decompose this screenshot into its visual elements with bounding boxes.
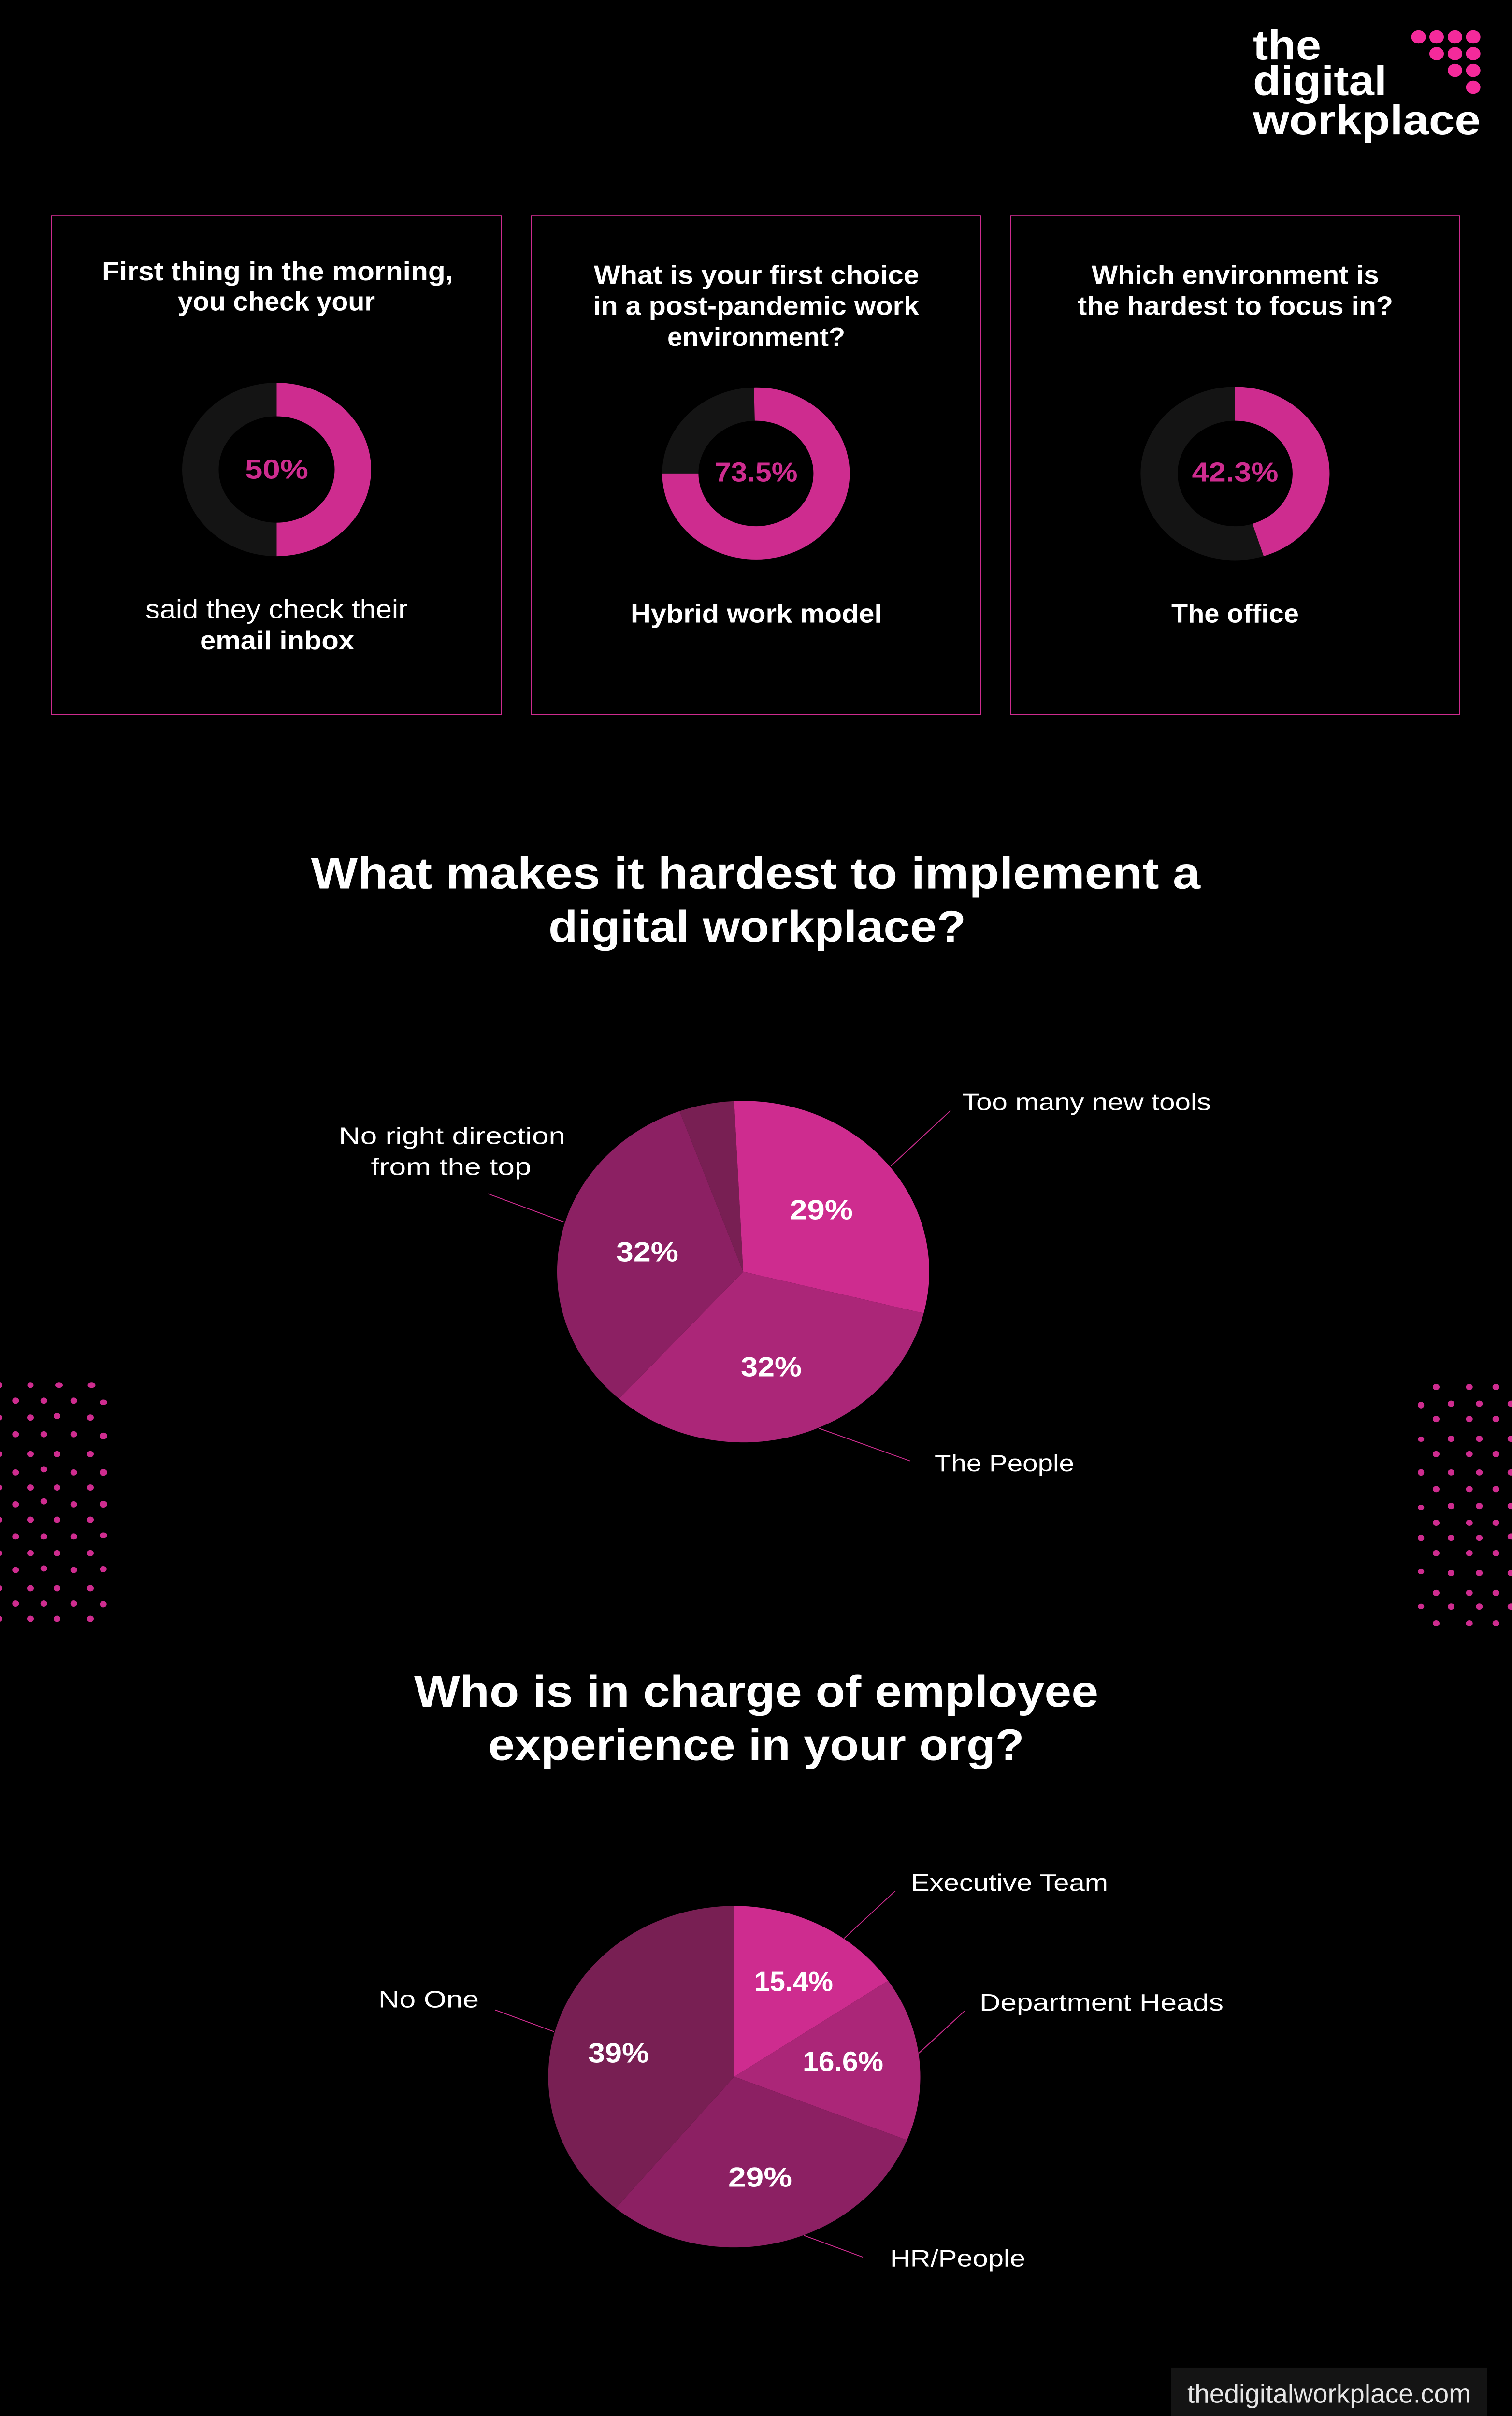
question text: What is your first choice <box>594 260 919 290</box>
category labels: from the top <box>371 1153 532 1180</box>
panel: post-pandemic work environment <box>532 216 980 715</box>
donut chart: 50%: 50% <box>245 454 308 485</box>
value labels: 16.6% <box>803 2045 883 2077</box>
question text <box>593 260 920 352</box>
logo wordmark <box>1253 22 1481 144</box>
value labels: 32% <box>616 1236 678 1267</box>
logo: the digital workplace <box>1253 22 1481 144</box>
answer text: said they check their <box>145 595 408 624</box>
panel: hardest environment to focus in <box>1011 216 1460 715</box>
category labels: Too many new tools <box>962 1089 1211 1115</box>
panel border <box>1011 216 1460 715</box>
value labels: 39% <box>588 2037 649 2069</box>
logo wordmark: workplace <box>1253 97 1481 144</box>
question text: environment? <box>667 322 845 352</box>
pie chart: employee experience owner <box>378 1869 1224 2272</box>
category labels: Department Heads <box>979 1989 1224 2016</box>
donut chart: 42.3% <box>1159 387 1329 556</box>
pie chart: hardest to implement <box>339 1089 1211 1477</box>
donut chart: 42.3%: 42.3% <box>1192 457 1278 488</box>
question text: Which environment is <box>1092 260 1379 290</box>
panel: first thing in the morning <box>52 216 501 715</box>
question text: First thing in the morning, <box>102 257 453 287</box>
answer text: The office <box>1171 599 1299 629</box>
heading: what makes it hardest: What makes it hardest to implement a <box>311 848 1201 898</box>
category labels: No right direction <box>339 1122 565 1149</box>
footer: website url <box>1171 2368 1487 2416</box>
value labels: 15.4% <box>754 1966 833 1997</box>
decorative dots: left <box>0 1382 107 1622</box>
category labels: No One <box>378 1986 479 2013</box>
value labels: 29% <box>790 1194 853 1225</box>
donut chart: 50% <box>201 383 371 556</box>
value labels: 32% <box>741 1351 802 1382</box>
question text: in a post-pandemic work <box>593 291 920 321</box>
panel border <box>532 216 980 715</box>
answer text: Hybrid work model <box>631 599 882 629</box>
heading: what makes it hardest: digital workplace? <box>548 902 966 951</box>
value labels: 29% <box>728 2161 792 2193</box>
question text: the hardest to focus in? <box>1078 291 1393 321</box>
leader lines <box>488 1111 950 1461</box>
pie slices <box>557 1101 929 1442</box>
panel border <box>52 216 501 715</box>
heading: what makes it hardest <box>311 848 1201 951</box>
footer: website url: thedigitalworkplace.com <box>1187 2379 1471 2409</box>
category labels: The People <box>935 1450 1074 1477</box>
heading: who is in charge <box>414 1667 1098 1769</box>
question text <box>1078 260 1393 321</box>
logo wordmark: digital <box>1253 58 1387 104</box>
logo dot triangle <box>1411 30 1481 94</box>
decorative dots: right <box>1418 1384 1512 1626</box>
question text: you check your <box>178 287 375 316</box>
category labels <box>339 1089 1211 1477</box>
category labels: HR/People <box>890 2245 1025 2272</box>
leader lines <box>495 1891 965 2257</box>
question text <box>102 257 453 316</box>
logo wordmark: the <box>1253 22 1321 69</box>
heading: who is in charge: experience in your org? <box>488 1720 1024 1769</box>
category labels <box>378 1869 1224 2272</box>
value labels <box>616 1194 853 1382</box>
value labels <box>588 1966 883 2193</box>
answer text: email inbox <box>200 626 354 655</box>
category labels: Executive Team <box>911 1869 1108 1896</box>
donut chart: 73.5% <box>662 388 850 560</box>
heading: who is in charge: Who is in charge of employee <box>414 1667 1098 1716</box>
donut chart: 73.5%: 73.5% <box>715 457 797 488</box>
answer text <box>145 595 408 655</box>
pie slices <box>548 1906 921 2247</box>
